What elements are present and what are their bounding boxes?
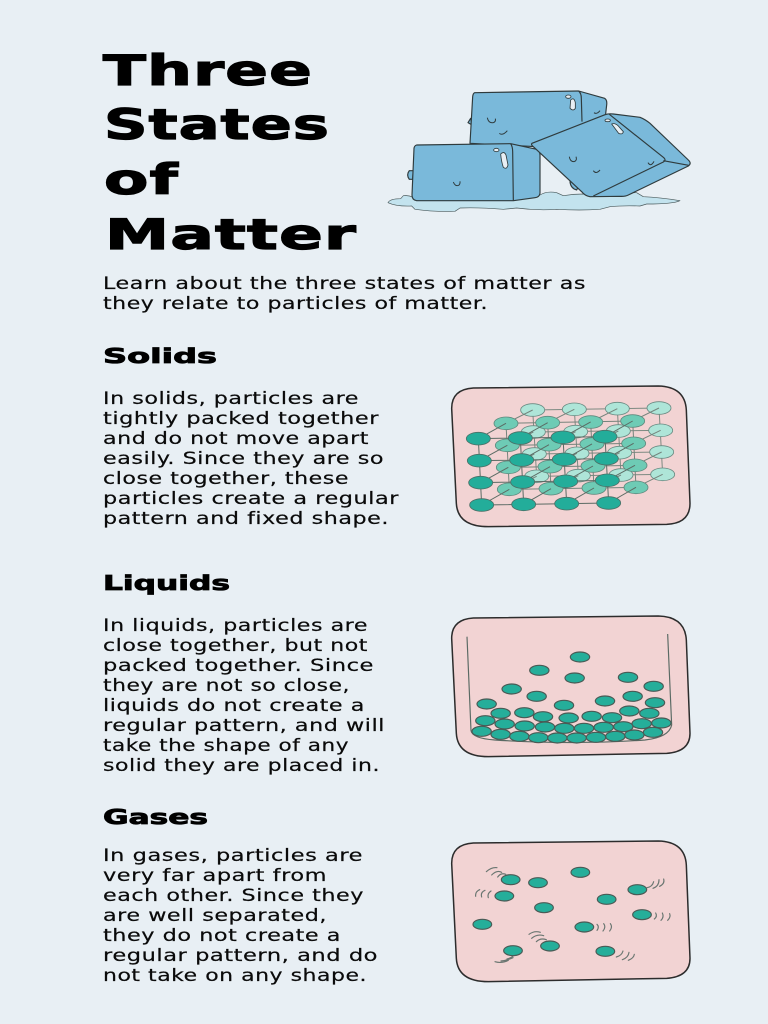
text: liquids description: close together, but not (103, 636, 368, 655)
text: liquids description: take the shape of any (103, 736, 349, 755)
intro text: Learn about the three states of matter as (103, 274, 586, 293)
text: solids description (103, 389, 399, 528)
text: gases description: each other. Since they (103, 886, 364, 905)
text: gases description: not take on any shape. (103, 966, 367, 985)
text: gases description (103, 846, 378, 985)
text: solids description: and do not move apart (103, 429, 369, 448)
text: liquids description: In liquids, particles are (103, 616, 368, 635)
text: liquids description (103, 616, 385, 775)
tilted cube (532, 114, 690, 197)
text: solids description: In solids, particles are (103, 389, 359, 408)
intro text: they relate to particles of matter. (103, 294, 488, 313)
puddle (388, 192, 680, 211)
front left cube (408, 144, 540, 201)
title (103, 46, 357, 259)
back cube (468, 91, 607, 147)
text: liquids description: solid they are placed in. (103, 756, 380, 775)
text: solids description: tightly packed together (103, 409, 379, 428)
text: liquids description: packed together. Since (103, 656, 374, 675)
heading: gases: Gases (103, 805, 208, 829)
text: solids description: close together, these (103, 469, 349, 488)
title: Three (103, 46, 313, 95)
text: solids description: easily. Since they are so (103, 449, 384, 468)
text: liquids description: they are not so close, (103, 676, 350, 695)
intro text (103, 274, 586, 313)
title: States (104, 100, 330, 149)
text: gases description: are well separated, (103, 906, 327, 925)
text: gases description: regular pattern, and do (103, 946, 378, 965)
text: solids description: pattern and fixed shape. (103, 509, 389, 528)
text: gases description: In gases, particles are (103, 846, 363, 865)
text: liquids description: regular pattern, and will (103, 716, 385, 735)
text: gases description: very far apart from (103, 866, 327, 885)
heading: liquids: Liquids (103, 571, 230, 595)
panel: solid particle lattice (452, 386, 690, 527)
panel: gas particles (452, 841, 690, 982)
text: solids description: particles create a regular (103, 489, 399, 508)
text: gases description: they do not create a (103, 926, 341, 945)
title: Matter (105, 210, 357, 259)
heading: solids: Solids (103, 344, 217, 368)
text: liquids description: liquids do not create a (103, 696, 365, 715)
title: of (104, 155, 179, 204)
panel: liquid particles in container (452, 616, 690, 757)
icon: melting ice cubes (388, 91, 690, 211)
